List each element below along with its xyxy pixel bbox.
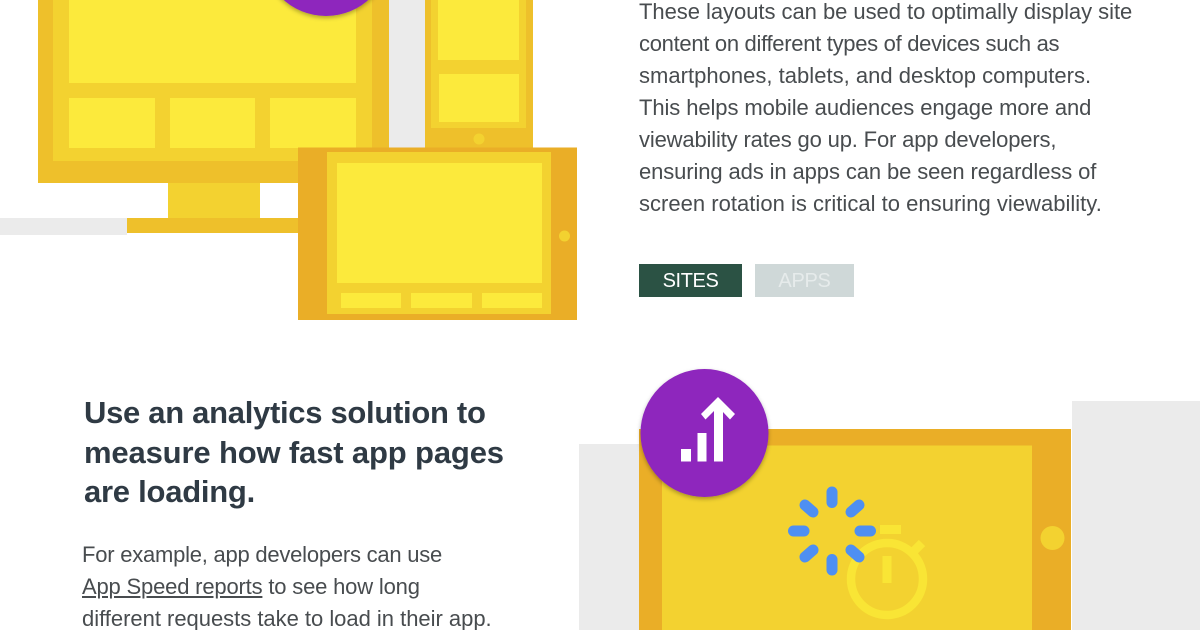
tab: apps: APPS	[778, 270, 831, 292]
text block: layouts description: smartphones, tablets, and desktop computers.	[639, 63, 1091, 88]
tab: sites	[639, 264, 742, 297]
tablet illustration landscape	[298, 148, 577, 320]
text block: app speed example: App Speed reports to see how long	[82, 574, 420, 599]
icon: stopwatch	[851, 530, 923, 615]
text block: app speed example: For example, app developers can use	[82, 542, 442, 567]
monitor illustration	[38, 0, 389, 233]
text block: layouts description: screen rotation is critical to ensuring viewability.	[639, 191, 1102, 216]
icon: loading spinner	[794, 492, 870, 570]
heading: analytics solution	[84, 395, 504, 509]
icon: purple analytics circle	[640, 369, 768, 497]
text block: app speed example	[82, 542, 492, 630]
tab: apps	[755, 264, 854, 297]
icon: purple circle top	[262, 0, 390, 16]
heading: analytics solution: measure how fast app pages	[84, 434, 504, 470]
background gray bars top	[0, 0, 425, 235]
text block: layouts description: viewability rates go up. For app developers,	[639, 127, 1056, 152]
heading: analytics solution: Use an analytics solution to	[84, 395, 486, 430]
heading: analytics solution: are loading.	[84, 474, 255, 509]
tablet illustration loading	[639, 429, 1071, 630]
tab: sites: SITES	[663, 270, 718, 292]
phone illustration	[425, 0, 533, 148]
text block: layouts description: This helps mobile audiences engage more and	[639, 95, 1091, 120]
text block: layouts description	[639, 0, 1132, 216]
background gray blocks bottom	[579, 401, 1200, 630]
text block: layouts description: content on different types of devices such as	[639, 31, 1059, 56]
text block: layouts description: ensuring ads in apps can be seen regardless of	[639, 159, 1096, 184]
